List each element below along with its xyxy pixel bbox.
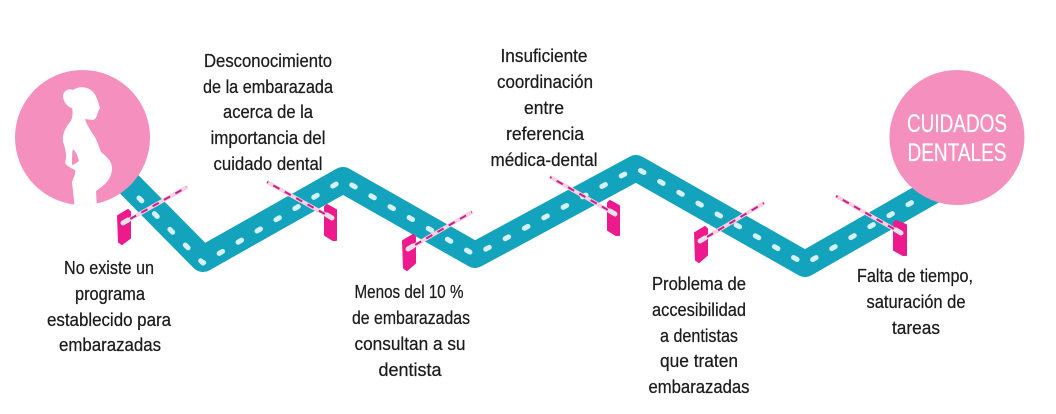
circle title: CUIDADOS — [907, 110, 1007, 138]
label: insuficiente coordinación — [490, 46, 598, 170]
winding road — [118, 168, 945, 264]
label: menos del 10 %: dentista — [378, 360, 442, 380]
label: desconocimiento: de la embarazada — [203, 77, 334, 97]
label: insuficiente coordinación: Insuficiente — [500, 46, 588, 66]
label: no existe un programa: embarazadas — [59, 335, 161, 355]
label: falta de tiempo — [857, 266, 973, 338]
barrier 4 — [550, 177, 619, 235]
label: problema de accesibilidad — [648, 274, 750, 397]
barrier 3 — [403, 212, 472, 270]
label: no existe un programa: establecido para — [47, 310, 172, 330]
label: no existe un programa: No existe un — [64, 258, 154, 278]
end circle: cuidados dentales — [890, 70, 1024, 205]
label: no existe un programa: programa — [75, 284, 146, 304]
label: no existe un programa — [47, 258, 172, 355]
label: desconocimiento: cuidado dental — [214, 154, 322, 174]
icon: pregnant woman silhouette — [63, 87, 112, 210]
label: insuficiente coordinación: médica-dental — [490, 150, 598, 170]
label: insuficiente coordinación: referencia — [506, 124, 585, 144]
label: insuficiente coordinación: entre — [524, 98, 564, 118]
barrier 6 — [836, 196, 906, 255]
label: problema de accesibilidad: que traten — [660, 351, 738, 371]
barrier 2 — [267, 182, 336, 240]
label: menos del 10 % — [352, 282, 470, 380]
barrier 5 — [695, 203, 764, 262]
label: falta de tiempo: tareas — [892, 318, 940, 338]
label: falta de tiempo: saturación de — [866, 292, 966, 312]
label: desconocimiento: Desconocimiento — [204, 51, 332, 71]
label: menos del 10 %: consultan a su — [354, 334, 466, 354]
label: problema de accesibilidad: a dentistas — [660, 326, 738, 346]
barrier 1 — [118, 187, 187, 244]
start circle with pregnant woman — [15, 70, 150, 210]
label: insuficiente coordinación: coordinación — [497, 72, 593, 92]
infographic canvas — [15, 48, 1024, 394]
label: problema de accesibilidad: embarazadas — [648, 377, 750, 397]
circle title — [907, 110, 1007, 167]
label: desconocimiento: importancia del — [210, 128, 326, 148]
label: problema de accesibilidad: Problema de — [652, 274, 746, 294]
label: menos del 10 %: de embarazadas — [352, 308, 470, 328]
label: falta de tiempo: Falta de tiempo, — [857, 266, 973, 286]
label: desconocimiento: acerca de la — [223, 102, 314, 122]
label: menos del 10 %: Menos del 10 % — [354, 282, 464, 302]
label: desconocimiento — [203, 51, 334, 174]
circle title: DENTALES — [908, 139, 1006, 167]
label: problema de accesibilidad: accesibilidad — [652, 300, 746, 320]
